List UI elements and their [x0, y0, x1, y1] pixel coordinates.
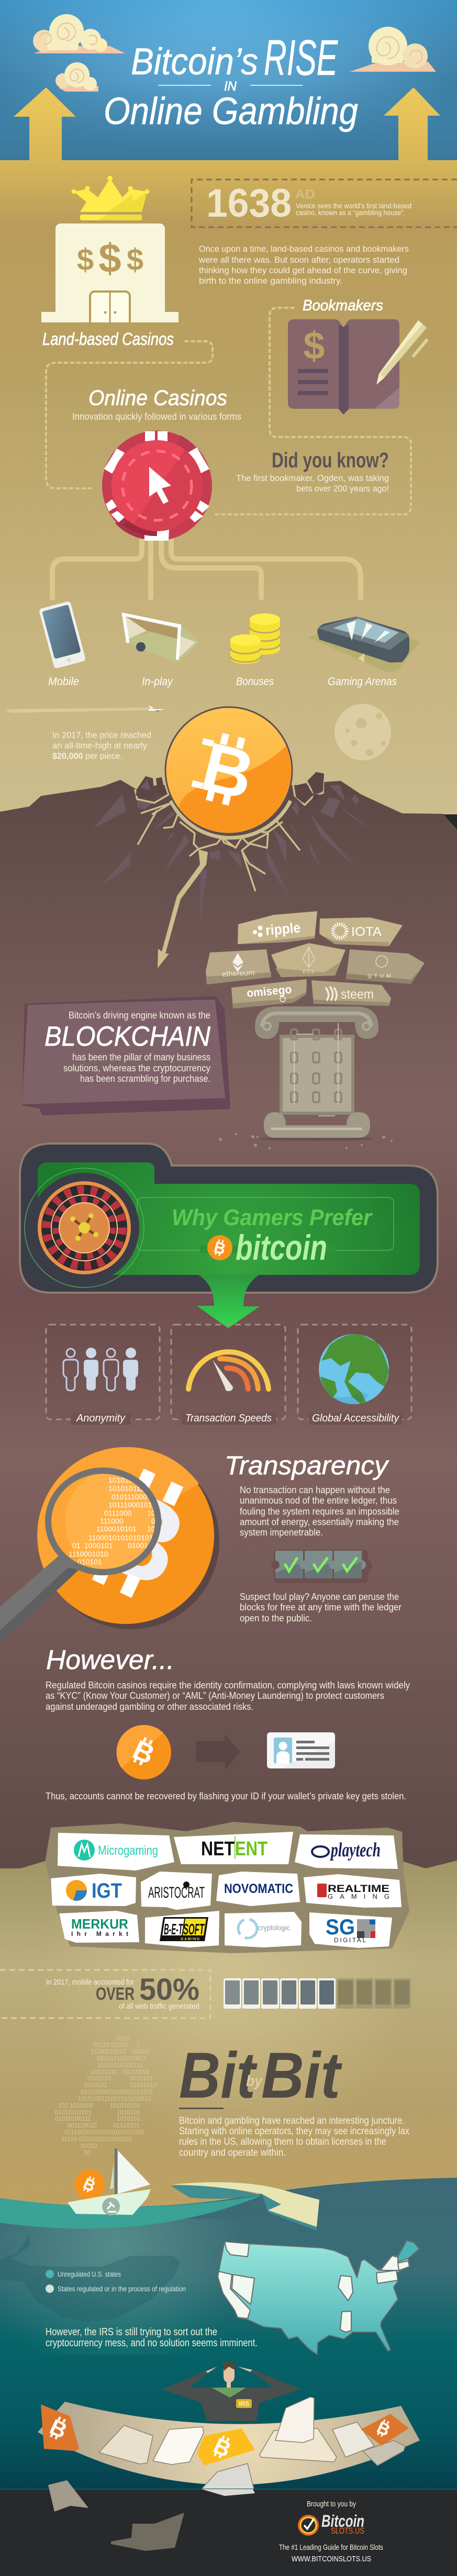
text: transparency body: unanimous nod of the entire ledger, thus [240, 1495, 397, 1506]
logo: netent: ENT [235, 1838, 267, 1860]
callout: mobile traffic stat [0, 1970, 210, 2018]
binary bitcoin mark: 0010 [117, 2036, 130, 2042]
icon: ledger book [288, 319, 427, 415]
text: 2017 price: $20,000 per piece. [52, 751, 122, 761]
text: bit by bit body [179, 2115, 409, 2158]
bill: orange right [361, 2414, 409, 2446]
icon: casino building [41, 223, 179, 322]
text: suspect foul play [240, 1592, 402, 1623]
background: sand [0, 160, 457, 814]
callout: 1638 AD: 1638 [206, 181, 292, 226]
title: Online Gambling [104, 91, 358, 132]
crypto stones on pillar [206, 911, 425, 1009]
logo: betsoft [145, 1911, 219, 1947]
binary bitcoin mark: 001010101010011 [97, 2056, 147, 2062]
mountain and brown background [0, 780, 457, 1868]
callout: mobile traffic stat: 50% [139, 1973, 199, 2007]
panel: why gamers prefer bitcoin: Why Gamers Prefer [172, 1205, 373, 1230]
binary bitcoin mark: 10101010 [130, 2082, 157, 2089]
binary bitcoin mark: 0101010011100101010101 [81, 2089, 153, 2096]
logo: cryptologic: cryptologic [258, 1923, 290, 1932]
logo: realtime gaming: GAMING [328, 1892, 389, 1900]
text: intro paragraph [198, 244, 409, 286]
text: bit by bit body: Starting with online operators, they may see increasingly lax [179, 2126, 409, 2137]
illustration: magnified bitcoin: 111000 [100, 1517, 124, 1525]
binary bitcoin mark: 10101010 [91, 2069, 117, 2076]
dashed connector: casinos to online [46, 341, 213, 488]
illustration: magnified bitcoin: 01001 [128, 1541, 148, 1550]
panel: blockchain: has been scrambling for purchase. [80, 1073, 210, 1084]
icon: chain of verified blocks [271, 1550, 372, 1583]
illustration: desk with scattered papers [38, 2397, 420, 2496]
panel: casino software logos [45, 1822, 409, 1953]
logo: novomatic: NOVOMATIC [224, 1881, 293, 1896]
logo: microgaming: Microgaming [98, 1843, 158, 1858]
illustration: magnified bitcoin: 101010111 [108, 1484, 144, 1493]
text: intro paragraph: birth to the online gambling industry. [199, 276, 342, 286]
stone: omisego: omisego [246, 983, 292, 1000]
panel: why gamers prefer bitcoin [20, 1144, 438, 1328]
logo: merkur: MERKUR [71, 1916, 128, 1932]
logo: sg digital: DIGITAL [334, 1936, 366, 1944]
wave: light teal band [0, 2196, 262, 2228]
binary bitcoin mark: 101 1010100 [58, 2103, 93, 2109]
icon: id card [267, 1732, 335, 1768]
panel: why gamers prefer bitcoin: B [212, 1239, 227, 1258]
logo: playtech [295, 1834, 398, 1869]
stone: ripple: ripple [265, 920, 301, 938]
logo: netent: NET [201, 1838, 235, 1860]
binary bitcoin mark: 01010101001 [55, 2110, 92, 2116]
card: anonymity [46, 1325, 160, 1425]
text: suspect foul play: open to the public. [240, 1613, 312, 1623]
icon: ionic pillar [255, 1006, 378, 1141]
stone: steem: steem [341, 987, 374, 1002]
binary bitcoin mark: 01010 [81, 2143, 97, 2149]
illustration: magnified bitcoin: 10 [147, 1509, 155, 1517]
illustration: magnified bitcoin: 1100010101 [96, 1525, 137, 1533]
text: intro paragraph: thinking how they could get ahead of the curve, giving [199, 265, 407, 275]
binary bitcoin mark: 01010101 [113, 2123, 140, 2129]
binary bitcoin mark: 01110010 [123, 2069, 149, 2076]
binary bitcoin mark: 001110010 [68, 2123, 97, 2129]
arrow: bitcoin to id [196, 1734, 240, 1769]
title: IN [224, 79, 237, 94]
icon: big bitcoin: B [194, 727, 262, 814]
binary bitcoin mark: 01010100111 [55, 2116, 91, 2122]
stone: omisego [231, 979, 307, 1009]
text: transparency body: system impenetrable. [240, 1527, 323, 1538]
label: in-play: In-play [142, 676, 173, 688]
logo: sg digital: SG [326, 1914, 355, 1939]
label: mobile: Mobile [48, 676, 79, 688]
icon: casino building: $ [127, 243, 143, 277]
footer [0, 2480, 457, 2576]
arrow: left [14, 87, 76, 160]
callout: 1638 AD [192, 180, 457, 227]
logo: bitcoin slots [298, 2512, 364, 2536]
icon: ledger book: $ [303, 324, 325, 367]
stone: iota [319, 917, 403, 946]
icon: big bitcoin [165, 707, 293, 848]
boat: bitcoin on sailboat [74, 2148, 150, 2200]
stone: ethereum: ethereum [221, 968, 255, 978]
illustration: magnified bitcoin: 10 [147, 1525, 155, 1533]
stone: ethereum [206, 949, 271, 984]
callout: did you know [236, 448, 389, 494]
stone: steem [311, 980, 391, 1006]
card: global accessibility: Global Accessibility [312, 1413, 399, 1424]
dashed connector: bookmakers [215, 308, 411, 514]
binary bitcoin mark [55, 2036, 157, 2156]
text: transparency body: fouling the system requires an impossible [240, 1506, 399, 1517]
footer: WWW.BITCOINSLOTS.US [292, 2555, 371, 2563]
text: irs [46, 2326, 258, 2349]
heading: transparency: Transparency [225, 1451, 389, 1480]
panel: blockchain: has been the pillar of many business [72, 1052, 210, 1062]
stone: eos [271, 943, 345, 977]
icon: casino building: $ [98, 235, 121, 281]
heading: bit by bit: Bit [179, 2040, 258, 2112]
icon: coin stacks [230, 613, 280, 664]
binary bitcoin mark: 01110 01010 [94, 2042, 128, 2048]
illustration: magnified bitcoin: 010101 [77, 1558, 102, 1566]
logo: netent [174, 1832, 293, 1864]
heading: bit by bit [179, 2040, 342, 2112]
rocks pushed up by coin [136, 772, 324, 803]
callout: 1638 AD: Venice sees the world’s first land-based [296, 201, 411, 210]
legend: Unregulated U.S. states [58, 2270, 121, 2278]
arrow: right [384, 87, 440, 160]
text: transparency body: No transaction can happen without the [240, 1485, 390, 1495]
wave crest [171, 2182, 319, 2231]
bill: orange right: B [374, 2417, 393, 2440]
crack with arrow pointing to pillar [158, 849, 208, 968]
connectors: chip to four forms [52, 539, 361, 598]
card: transaction speeds [171, 1325, 285, 1425]
icon: mobile phone [39, 601, 86, 669]
illustration: irs agent: IRS [239, 2400, 249, 2407]
heading: bit by bit: by [246, 2073, 263, 2090]
label: gaming arenas: Gaming Arenas [328, 676, 397, 688]
callout: did you know: Did you know? [272, 448, 389, 472]
text: 2017 price: In 2017, the price reached [52, 730, 151, 740]
logo: betsoft: SOFT [183, 1921, 205, 1938]
text: suspect foul play: blocks for free at any time with the ledger [240, 1602, 402, 1612]
stone: qtum: QTUM [367, 973, 393, 979]
bill: orange left: B [46, 2414, 71, 2443]
logo: aristocrat: ARISTOCRAT [148, 1884, 205, 1901]
logo: playtech: playtech [330, 1839, 381, 1861]
panel: blockchain: Bitcoin’s driving engine known as the [69, 1010, 210, 1021]
crack ring [171, 801, 291, 838]
logo: igt [51, 1874, 136, 1906]
illustration: magnified bitcoin [0, 1447, 219, 1643]
footer: Brought to you by [307, 2500, 356, 2508]
callout: did you know: bets over 200 years ago! [296, 484, 389, 494]
illustration: magnified bitcoin: 010111000 [112, 1493, 147, 1501]
logo: sg digital [309, 1912, 392, 1948]
text: intro paragraph: Once upon a time, land-based casinos and bookmakers [199, 244, 409, 254]
logo: aristocrat [141, 1872, 212, 1910]
logo: realtime gaming: REALTIME [328, 1884, 389, 1895]
card: global accessibility [298, 1325, 411, 1425]
bill: yellow center: B [210, 2433, 235, 2462]
text: bit by bit body: rules in the US, allowing them to obtain licenses in the [179, 2136, 386, 2147]
text: 2017 price: an all-time-high at nearly [52, 741, 147, 751]
logo: betsoft: B-E-T [164, 1921, 183, 1938]
illustration: magnified bitcoin: B [73, 1458, 206, 1614]
text: transparency body: amount of energy, essentially making the [240, 1517, 399, 1527]
panel: blockchain [22, 996, 230, 1115]
label: bonuses: Bonuses [236, 676, 274, 688]
binary bitcoin mark: 0101010 [87, 2076, 111, 2082]
callout: 1638 AD: AD [295, 187, 315, 201]
text: regulated casinos: as “KYC” (Know Your Customer) or “AML” (Anti-Money Laundering) to protect customers [46, 1690, 384, 1701]
icon: in-play goal [122, 613, 199, 663]
icon: moon [335, 704, 391, 760]
binary bitcoin mark: 1010101 [117, 2110, 140, 2116]
callout: mobile traffic stat: OVER [96, 1984, 135, 2004]
callout: mobile traffic stat: In 2017, mobile accounted for [46, 1978, 134, 1987]
illustration: irs agent [162, 2362, 301, 2421]
legend [46, 2270, 186, 2293]
mountain facets [93, 785, 377, 926]
footer: The #1 Leading Guide for Bitcoin Slots [279, 2543, 383, 2552]
icon: airplane with contrail [0, 705, 165, 713]
logo: cryptologic [225, 1912, 302, 1947]
illustration: magnified bitcoin: 0111000 [104, 1509, 132, 1517]
background: lower tan [0, 1853, 457, 2230]
map: united states [218, 2241, 419, 2355]
illustration: magnified bitcoin: 11000101010101010 [88, 1533, 158, 1542]
logo: bitcoin slots: Bitcoin [321, 2512, 364, 2530]
heading: bit by bit: Bit [261, 2040, 342, 2112]
panel: blockchain: solutions, whereas the cryptocurrency [63, 1063, 210, 1073]
icon: crown [71, 176, 150, 220]
title: RISE [264, 30, 338, 86]
rubble [219, 1133, 393, 1149]
label: bookmakers: Bookmakers [303, 297, 383, 314]
binary bitcoin mark: 10 [84, 2150, 91, 2156]
callout: did you know: The first bookmaker, Ogden, was taking [236, 473, 389, 483]
binary bitcoin mark: 11100010101 [91, 2049, 127, 2055]
icon: gaming arena stadium [308, 617, 420, 672]
heading: online casinos: Online Casinos [88, 386, 227, 410]
illustration: whale silhouette [0, 2234, 180, 2322]
bill: orange left [41, 2404, 79, 2451]
logo: merkur [59, 1911, 139, 1943]
panel: blockchain: BLOCKCHAIN [44, 1021, 211, 1052]
binary bitcoin mark: 01001 [132, 2049, 149, 2055]
text: irs: However, the IRS is still trying to sort out the [46, 2326, 217, 2338]
icon: bitcoin coin [116, 1725, 171, 1779]
binary bitcoin mark: 0010101 [130, 2076, 153, 2082]
binary bitcoin mark: 101010101 [110, 2103, 140, 2109]
logo: merkur: Ihr Markt [71, 1930, 128, 1937]
heading: online casinos [72, 386, 241, 422]
panel: why gamers prefer bitcoin: bitcoin [236, 1228, 327, 1268]
binary bitcoin mark: 1010101 [84, 2082, 107, 2089]
legend: States regulated or in the process of regulation [58, 2284, 186, 2293]
icon: bitcoin coin: B [128, 1734, 159, 1771]
callout: mobile traffic stat: of all web traffic generated [119, 2002, 199, 2011]
label: land-based casinos: Land-based Casinos [42, 329, 174, 349]
binary bitcoin mark: 10101010100111 [97, 2063, 143, 2069]
text: thus accounts: Thus, accounts cannot be recovered by flashing your ID if your wallet’s private key gets stolen. [46, 1791, 406, 1801]
logo: igt: IGT [92, 1879, 122, 1902]
illustration: magnified bitcoin: 0 [112, 1468, 116, 1476]
binary bitcoin mark: 1010101 [117, 2116, 140, 2122]
text: bit by bit body: Bitcoin and gambling have reached an interesting juncture. [179, 2115, 405, 2126]
illustration: magnified bitcoin: 1000101 [84, 1541, 113, 1550]
text: regulated casinos: against underaged gambling or other associated risks. [46, 1701, 253, 1712]
illustration: magnified bitcoin: 1110001010 [69, 1550, 108, 1558]
card: transaction speeds: Transaction Speeds [185, 1413, 272, 1424]
sea [0, 2178, 457, 2491]
illustration: magnified bitcoin: 10111000101 [108, 1500, 152, 1509]
background: sky [0, 0, 457, 160]
text: regulated casinos: Regulated Bitcoin casinos require the identity confirmation, complying with laws known widely [46, 1680, 410, 1690]
cracks in mountain around coin [135, 772, 324, 891]
cloud: lower left [55, 62, 98, 92]
card: anonymity: Anonymity [76, 1413, 126, 1424]
illustration: magnified bitcoin: 01 [72, 1541, 81, 1550]
bill: yellow center [197, 2428, 255, 2466]
heading: online casinos: Innovation quickly followed in various forms [72, 411, 241, 422]
text: irs: cryptocurrency mess, and no solution seems imminent. [46, 2337, 258, 2349]
cloud: upper left [33, 14, 125, 53]
text: 2017 price [52, 730, 151, 761]
binary bitcoin mark: 11100 0101010101010101 [61, 2136, 132, 2143]
binary bitcoin mark: 1010100111001010101010 [78, 2096, 151, 2102]
icon: roulette wheel [38, 1181, 131, 1274]
binary bitcoin mark: 011100101010101010101010 [64, 2130, 144, 2136]
cloud: right [350, 27, 436, 72]
stone: qtum [346, 949, 425, 984]
logo: realtime gaming [304, 1874, 402, 1908]
icon: poker chip with cursor [102, 431, 212, 541]
text: bit by bit body: country and operate within. [179, 2147, 286, 2158]
binary bitcoin mark: 1 [136, 2042, 139, 2048]
callout: 1638 AD: casino, known as a “gambling house”. [296, 208, 405, 217]
logo: betsoft: GAMING [181, 1937, 200, 1941]
text: regulated casinos [46, 1680, 410, 1712]
icon: casino building: $ [77, 243, 94, 277]
text: intro paragraph: were all there was. But soon after, operators started [198, 255, 399, 265]
green arrow [197, 1275, 260, 1328]
illustration: magnified bitcoin: 10101010 [108, 1476, 141, 1484]
text: suspect foul play: Suspect foul play? Anyone can peruse the [240, 1592, 399, 1602]
illustration: magnified bitcoin: 0 [151, 1517, 155, 1525]
stone: iota: IOTA [351, 925, 382, 939]
logo: bitcoin slots: SLOTS.US [331, 2526, 364, 2536]
title [104, 30, 358, 132]
logo: novomatic [216, 1872, 300, 1906]
stone: eos: EOS [303, 969, 315, 974]
logo: microgaming [58, 1833, 174, 1871]
boat: bitcoin on sailboat: B [81, 2175, 98, 2196]
heading: however: However... [46, 1645, 174, 1675]
stone: ripple [238, 911, 317, 944]
text: transparency body [240, 1485, 399, 1538]
boat hull [68, 2189, 151, 2215]
chart: phones showing 50 percent [224, 1978, 411, 2009]
title: Bitcoin’s [131, 41, 258, 83]
